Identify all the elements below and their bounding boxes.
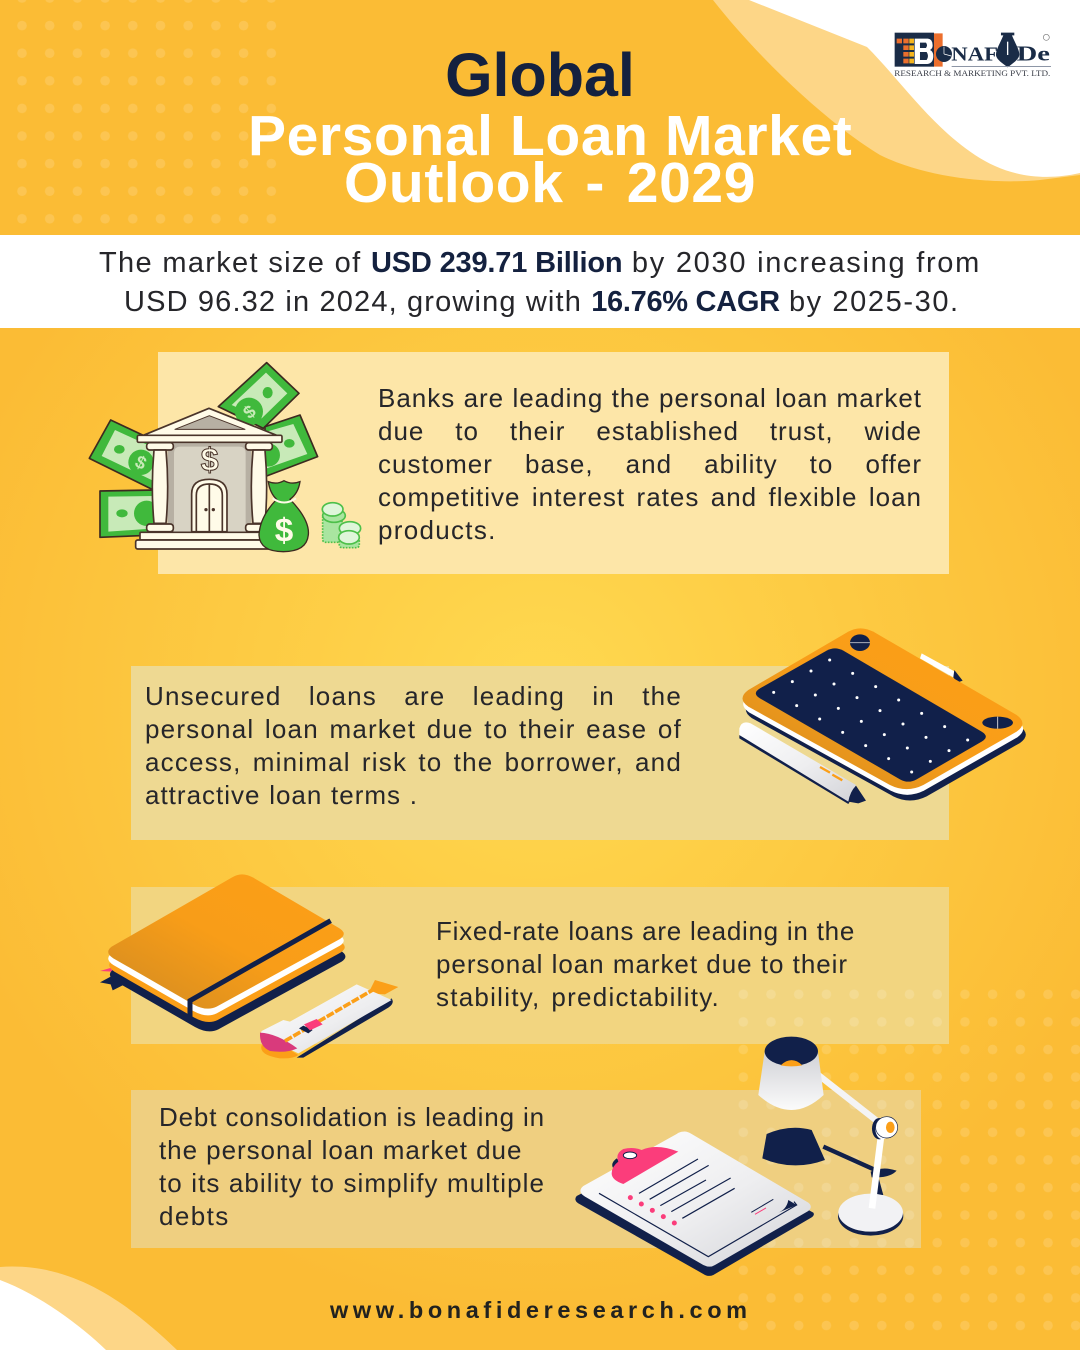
title: Personal Loan Market Outlook (248, 104, 852, 215)
icon: clipboard clip (612, 1158, 622, 1168)
icon: bank with money: $ (239, 401, 260, 423)
text: banks (378, 383, 922, 545)
text: banks: Banks are leading the personal loan market (378, 383, 922, 413)
text: banks: customer base, and ability to offer (378, 449, 922, 479)
text: unsecured loans: Unsecured loans are leading in the (145, 681, 682, 711)
title: Personal Loan Market Outlook: Outlook - 2029 (344, 151, 756, 215)
text: debt consolidation: to its ability to simplify multiple (159, 1168, 545, 1198)
corner wave: top right (713, 0, 1080, 181)
text: debt consolidation: the personal loan market due (159, 1135, 522, 1165)
icon: bank notes (89, 363, 318, 537)
icon: clipboard (575, 1132, 814, 1276)
icon: notebook and cutter (100, 874, 398, 1058)
icon: bank building (136, 408, 282, 549)
icon: bank with money: $ (201, 442, 219, 478)
logo: Bonafide Research (894, 33, 1051, 78)
summary text: USD 96.32 in 2024, growing with 16.76% CAGR by 2025-30. (124, 286, 960, 318)
icon: bank with money (89, 363, 361, 552)
list lines (599, 1159, 797, 1257)
logo: Bonafide Research: De (1017, 44, 1050, 66)
icon: stylus (739, 735, 852, 804)
text: debt consolidation: debts (159, 1201, 230, 1231)
title: Personal Loan Market Outlook: Personal Loan Market (248, 104, 852, 168)
icon: notebook (110, 897, 345, 1031)
icon: tablet screen (756, 648, 986, 782)
panel: unsecured loans (131, 666, 949, 840)
corner wave: bottom left (0, 1267, 177, 1350)
text: unsecured loans: access, minimal risk to the borrower, and (145, 747, 682, 777)
icon: desk lamp (758, 1037, 903, 1236)
logo: Bonafide Research: NAF (951, 44, 998, 66)
text: fixed-rate loans: personal loan market due to their (436, 949, 848, 979)
icon: bank with money: $ (275, 513, 294, 550)
panel: fixed-rate loans (131, 887, 949, 1044)
title: Global: Global (445, 41, 635, 109)
text: fixed-rate loans: Fixed-rate loans are leading in the (436, 916, 855, 946)
icon: cutter (368, 980, 398, 994)
icon: money bag (259, 481, 308, 552)
icon: bookmark (100, 971, 123, 990)
summary text (99, 247, 981, 318)
text: debt consolidation (159, 1102, 545, 1231)
icon: tablet body (746, 640, 1026, 800)
text: unsecured loans: attractive loan terms . (145, 780, 418, 810)
summary text: The market size of USD 239.71 Billion by 2030 increasing from (99, 247, 981, 279)
text: banks: products. (378, 515, 497, 545)
text: banks: competitive interest rates and flexible loan (378, 482, 922, 512)
panel: debt consolidation (131, 1090, 921, 1248)
icon: tablet and stylus (739, 628, 1026, 804)
icon: bank with money: $ (132, 451, 150, 474)
footer website: www.bonafideresearch.com (330, 1297, 752, 1323)
text: fixed-rate loans (436, 916, 855, 1012)
icon: tablet clip (920, 653, 955, 677)
icon: coin stacks (322, 503, 361, 548)
text: debt consolidation: Debt consolidation is leading in (159, 1102, 545, 1132)
panel: banks (158, 352, 949, 574)
text: banks: due to their established trust, wide (378, 416, 922, 446)
header band (0, 0, 1080, 235)
text: unsecured loans: personal loan market due to their ease of (145, 714, 682, 744)
logo: Bonafide Research: RESEARCH & MARKETING PVT. LTD. (894, 68, 1050, 78)
text: fixed-rate loans: stability, predictability. (436, 982, 720, 1012)
summary white band (0, 235, 1080, 328)
text: unsecured loans (145, 681, 682, 810)
